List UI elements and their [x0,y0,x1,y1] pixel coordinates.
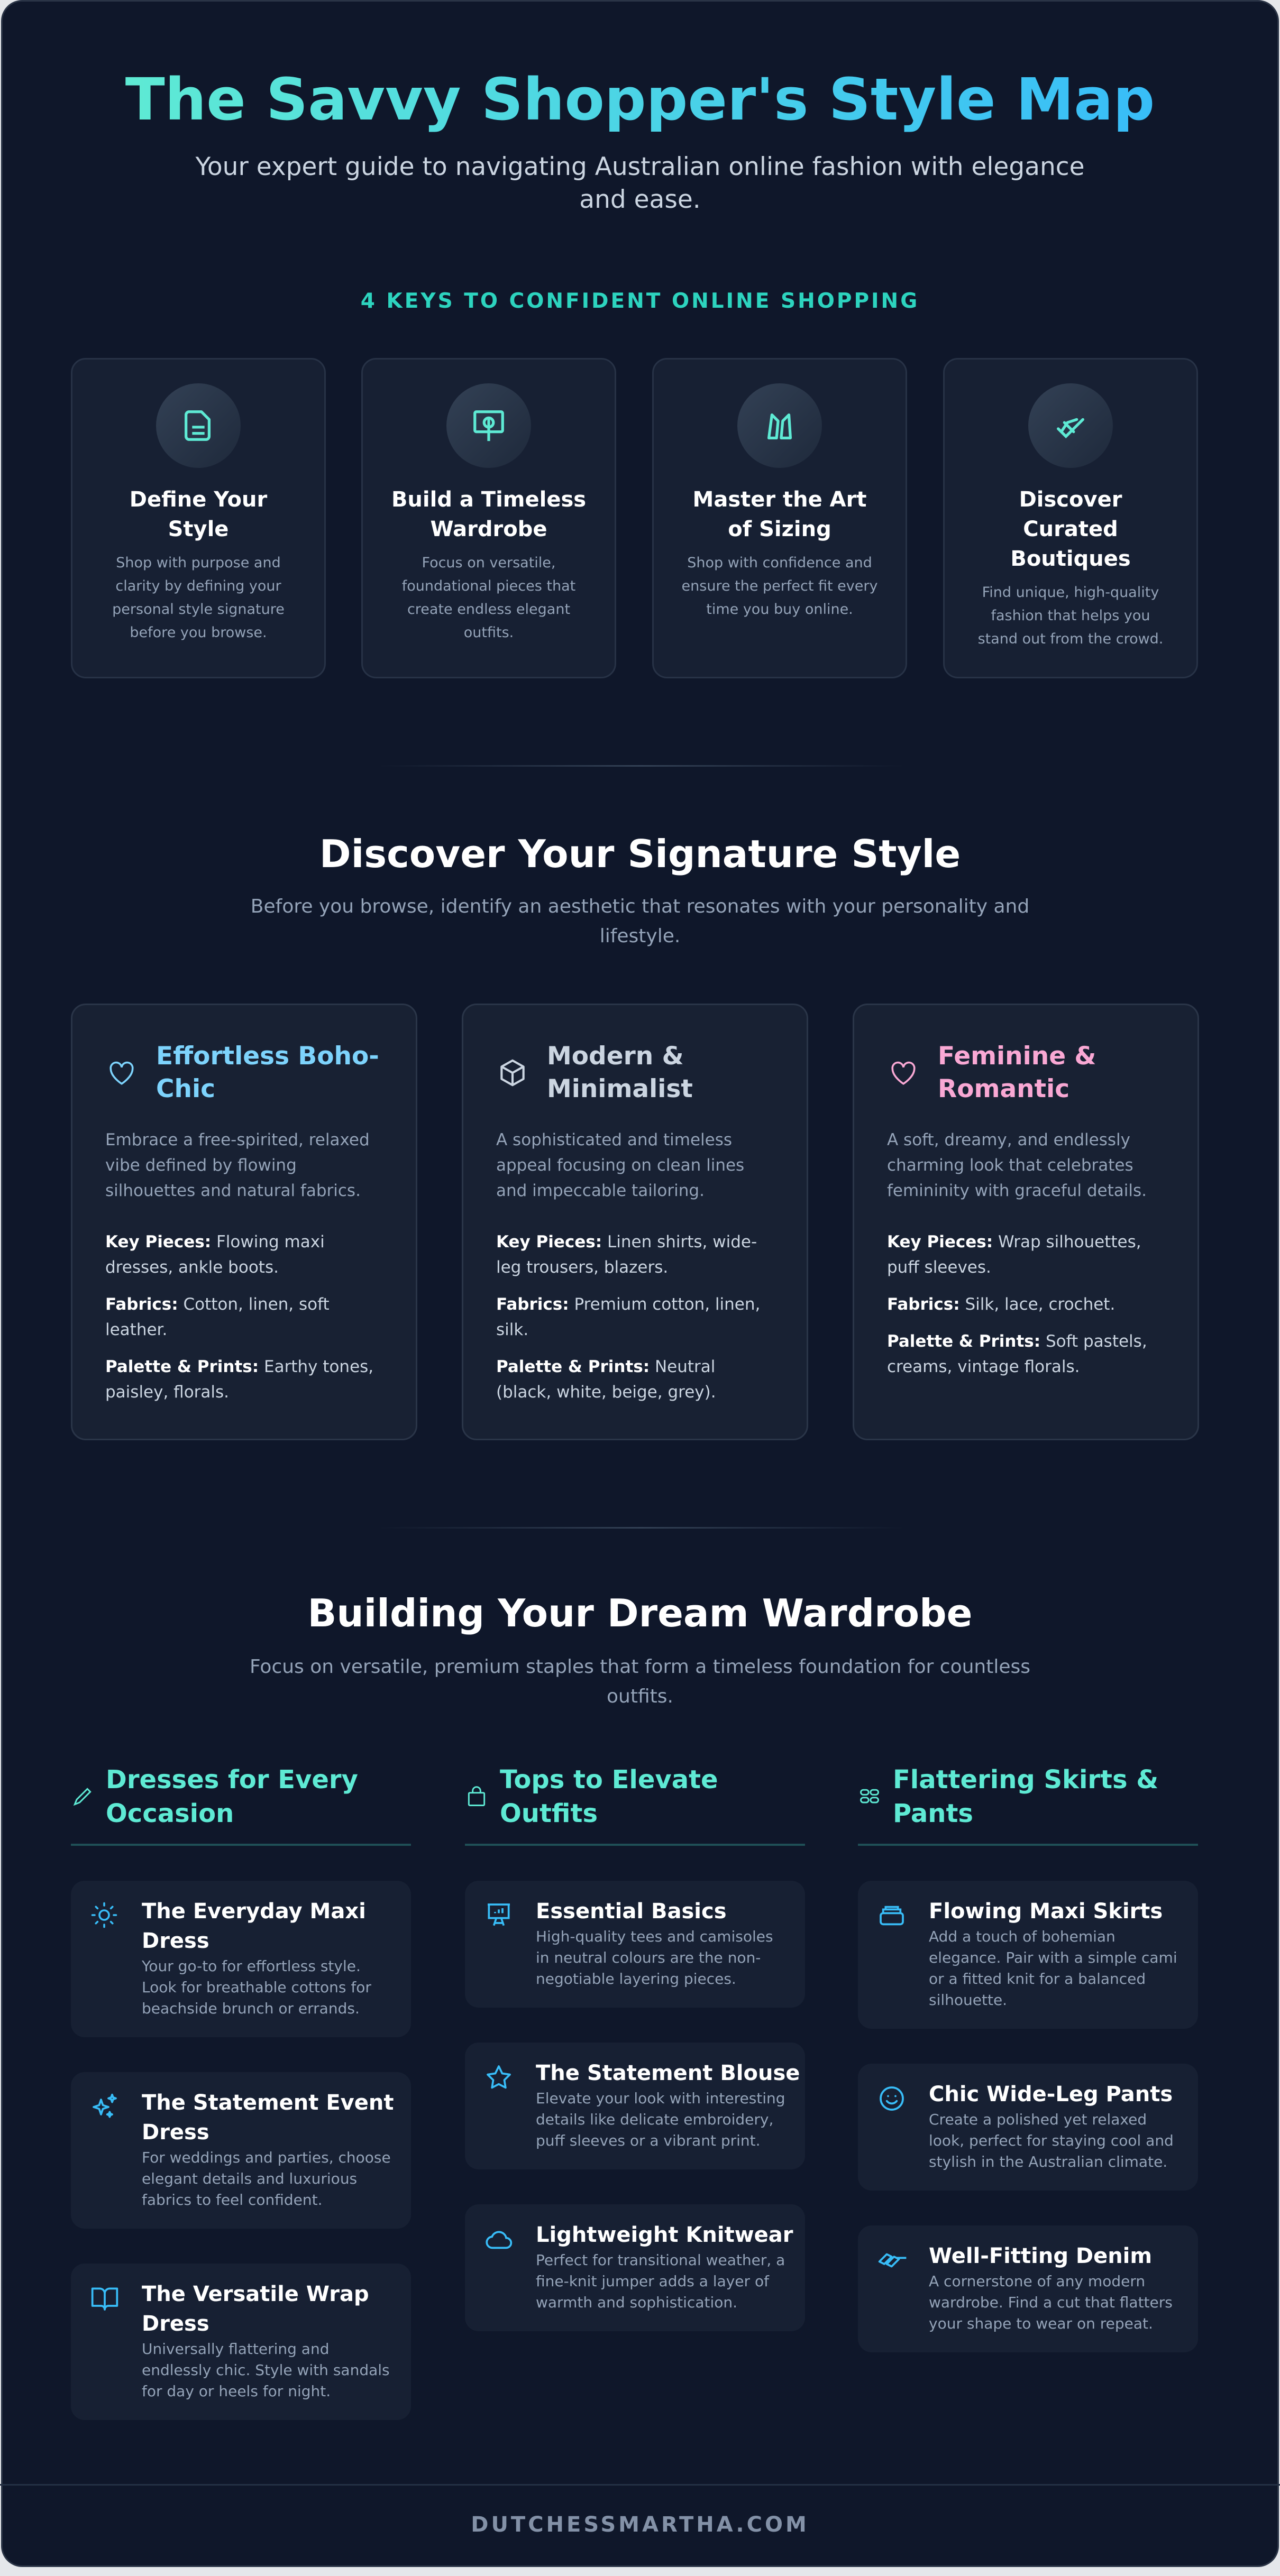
item: everyday maxi [71,1881,411,2037]
item: statement event: The Statement Event [142,2091,394,2115]
panel: key card boutiques: fashion that helps you [991,608,1150,624]
item: statement blouse: The Statement Blouse [536,2061,800,2085]
panel: key card timeless wardrobe: Wardrobe [430,517,547,541]
item: everyday maxi: beachside brunch or errands. [142,2000,360,2017]
item: statement blouse: details like delicate embroidery, [536,2111,773,2128]
item: denim: wardrobe. Find a cut that flatters [929,2294,1173,2311]
panel: feminine romantic: charming look that celebrates [887,1156,1133,1175]
panel: modern minimalist: Minimalist [547,1074,693,1103]
panel: key card define style: before you browse. [130,624,267,641]
item: maxi skirts [858,1881,1198,2029]
subtitle: Your expert guide to navigating Australian online fashion with elegance [195,152,1085,181]
item: statement event: For weddings and parties, choose [142,2149,391,2166]
item: wrap dress: The Versatile Wrap [142,2282,369,2306]
item: essential basics: High-quality tees and camisoles [536,1928,773,1945]
panel: boho chic: dresses, ankle boots. [105,1258,279,1277]
panel: feminine romantic: Romantic [938,1074,1069,1103]
icon: document [156,383,241,468]
item: statement event: Dress [142,2120,209,2145]
item: wrap dress: endlessly chic. Style with sandals [142,2361,390,2379]
item: knitwear: fine-knit jumper adds a layer of [536,2273,769,2290]
item: denim [858,2225,1198,2352]
item: wide-leg pants: Create a polished yet relaxed [929,2111,1147,2128]
item: statement event [71,2072,411,2229]
panel: feminine romantic: puff sleeves. [887,1258,991,1277]
icon: sizing [737,383,822,468]
panel: key card sizing [652,358,907,678]
panel: skirts column: Pants [893,1799,973,1828]
panel: key card define style: personal style signature [112,601,285,618]
panel: feminine romantic: Feminine & [938,1042,1096,1071]
panel: tops column: Outfits [500,1799,598,1828]
panel: dresses column [71,1765,411,2420]
item: statement event: fabrics to feel confident. [142,2191,323,2209]
panel: key card sizing: of Sizing [728,517,831,541]
panel: key card boutiques: Boutiques [1010,547,1131,571]
panel: modern minimalist: leg trousers, blazers. [496,1258,668,1277]
text: wardrobe subtitle [250,1656,1030,1707]
panel: feminine romantic: Palette & Prints: Soft pastels, [887,1332,1147,1351]
panel: feminine romantic: A soft, dreamy, and endlessly [887,1130,1130,1149]
panel: key card sizing: Master the Art [693,487,866,512]
panel: key card timeless wardrobe: foundational pieces that [402,578,575,594]
item: essential basics: Essential Basics [536,1899,727,1924]
panel: modern minimalist: Fabrics: Premium cotton, linen, [496,1295,760,1314]
item: wrap dress: Dress [142,2312,209,2336]
panel: key card define style: Style [168,517,228,541]
item: wide-leg pants: look, perfect for staying cool and [929,2132,1174,2149]
panel: key card timeless wardrobe: Build a Timeless [391,487,586,512]
text: signature subtitle [251,896,1029,947]
item: statement blouse: Elevate your look with interesting [536,2090,785,2107]
panel: modern minimalist: (black, white, beige, grey). [496,1383,716,1402]
panel: boho chic [71,1004,417,1440]
panel: modern minimalist [462,1004,808,1440]
panel: dresses column: Dresses for Every [106,1765,358,1795]
item: denim: Well-Fitting Denim [929,2244,1152,2268]
panel: key card timeless wardrobe: outfits. [464,624,514,641]
item: wide-leg pants: stylish in the Australian climate. [929,2153,1167,2170]
panel: key card timeless wardrobe: Focus on versatile, [422,555,555,571]
title: The Savvy Shopper's Style Map [125,66,1155,133]
panel: modern minimalist: Key Pieces: Linen shirts, wide- [496,1232,757,1252]
panel: modern minimalist: Palette & Prints: Neutral [496,1357,715,1376]
text: wardrobe subtitle: outfits. [607,1686,673,1707]
item: essential basics: in neutral colours are the non- [536,1949,761,1966]
subtitle [195,152,1085,214]
panel: tops column: Tops to Elevate [500,1765,718,1795]
panel: key card boutiques: Curated [1023,517,1118,541]
section label: 4 keys: 4 KEYS TO CONFIDENT ONLINE SHOPPING [361,289,919,313]
panel: boho chic: Effortless Boho- [156,1042,379,1071]
panel: skirts column: Flattering Skirts & [893,1765,1158,1795]
subtitle: and ease. [579,185,701,214]
panel: key card boutiques [943,358,1198,678]
panel: dresses column: Occasion [106,1799,234,1828]
item: denim: your shape to wear on repeat. [929,2315,1153,2332]
panel: skirts column [858,1765,1198,2352]
panel: modern minimalist: A sophisticated and timeless [496,1130,732,1149]
panel: key card timeless wardrobe [361,358,616,678]
item: denim: A cornerstone of any modern [929,2273,1145,2290]
heading: dream wardrobe: Building Your Dream Wardrobe [307,1591,972,1635]
item: everyday maxi: Your go-to for effortless style. [142,1957,361,1975]
panel: boho chic: vibe defined by flowing [105,1156,297,1175]
item: statement blouse [465,2043,805,2169]
panel: key card boutiques: Find unique, high-quality [982,584,1159,601]
panel: modern minimalist: and impeccable tailoring. [496,1181,705,1200]
item: maxi skirts: Flowing Maxi Skirts [929,1899,1163,1924]
panel: boho chic: Embrace a free-spirited, relaxed [105,1130,370,1149]
panel: boho chic: silhouettes and natural fabrics. [105,1181,361,1200]
panel: boho chic: Key Pieces: Flowing maxi [105,1232,325,1252]
panel: key card sizing: time you buy online. [706,601,853,618]
panel: feminine romantic: femininity with graceful details. [887,1181,1147,1200]
item: wide-leg pants [858,2064,1198,2191]
panel: boho chic: Chic [156,1074,215,1103]
panel: key card define style: Define Your [130,487,267,512]
item: everyday maxi: Dress [142,1929,209,1953]
item: knitwear: Lightweight Knitwear [536,2223,793,2247]
panel: key card sizing: ensure the perfect fit every [682,578,877,594]
panel: tops column [465,1765,805,2331]
footer: DUTCHESSMARTHA.COM [471,2513,809,2537]
item: everyday maxi: Look for breathable cottons for [142,1979,371,1996]
panel: modern minimalist: silk. [496,1320,528,1339]
panel: feminine romantic: Fabrics: Silk, lace, crochet. [887,1295,1115,1314]
icon: board [446,383,531,468]
panel: key card sizing: Shop with confidence and [687,555,872,571]
icon: tag [1028,383,1113,468]
panel: key card define style: Shop with purpose and [116,555,281,571]
item: statement blouse: puff sleeves or a vibrant print. [536,2132,761,2149]
panel: boho chic: Palette & Prints: Earthy tones, [105,1357,373,1376]
panel: boho chic: leather. [105,1320,167,1339]
panel: boho chic: Fabrics: Cotton, linen, soft [105,1295,330,1314]
panel: key card boutiques: stand out from the crowd. [978,631,1163,647]
panel: key card boutiques: Discover [1019,487,1122,512]
item: wrap dress [71,2264,411,2420]
item: maxi skirts: or a fitted knit for a balanced [929,1970,1146,1988]
item: wide-leg pants: Chic Wide-Leg Pants [929,2082,1173,2106]
item: knitwear: warmth and sophistication. [536,2294,737,2311]
panel: key card timeless wardrobe: create endless elegant [407,601,570,618]
panel: modern minimalist: appeal focusing on clean lines [496,1156,744,1175]
item: essential basics [465,1881,805,2008]
item: knitwear [465,2204,805,2331]
item: statement event: elegant details and luxurious [142,2170,357,2187]
item: maxi skirts: Add a touch of bohemian [929,1928,1116,1945]
item: everyday maxi: The Everyday Maxi [142,1899,366,1924]
panel: modern minimalist: Modern & [547,1042,684,1071]
item: maxi skirts: silhouette. [929,1991,1007,2009]
text: signature subtitle: Before you browse, identify an aesthetic that resonates with your personality and [251,896,1029,917]
panel: feminine romantic: Key Pieces: Wrap silhouettes, [887,1232,1141,1252]
item: knitwear: Perfect for transitional weather, a [536,2251,785,2269]
panel: key card define style: clarity by defining your [115,578,281,594]
item: wrap dress: for day or heels for night. [142,2382,331,2400]
panel: boho chic: paisley, florals. [105,1383,229,1402]
item: maxi skirts: elegance. Pair with a simple cami [929,1949,1177,1966]
item: wrap dress: Universally flattering and [142,2340,329,2358]
item: essential basics: negotiable layering pieces. [536,1970,736,1988]
text: signature subtitle: lifestyle. [600,925,680,947]
panel: key card define style [71,358,326,678]
panel: feminine romantic: creams, vintage florals. [887,1357,1080,1376]
text: wardrobe subtitle: Focus on versatile, premium staples that form a timeless foundation for countless [250,1656,1030,1678]
heading: signature style: Discover Your Signature Style [319,832,961,876]
panel: feminine romantic [853,1004,1199,1440]
